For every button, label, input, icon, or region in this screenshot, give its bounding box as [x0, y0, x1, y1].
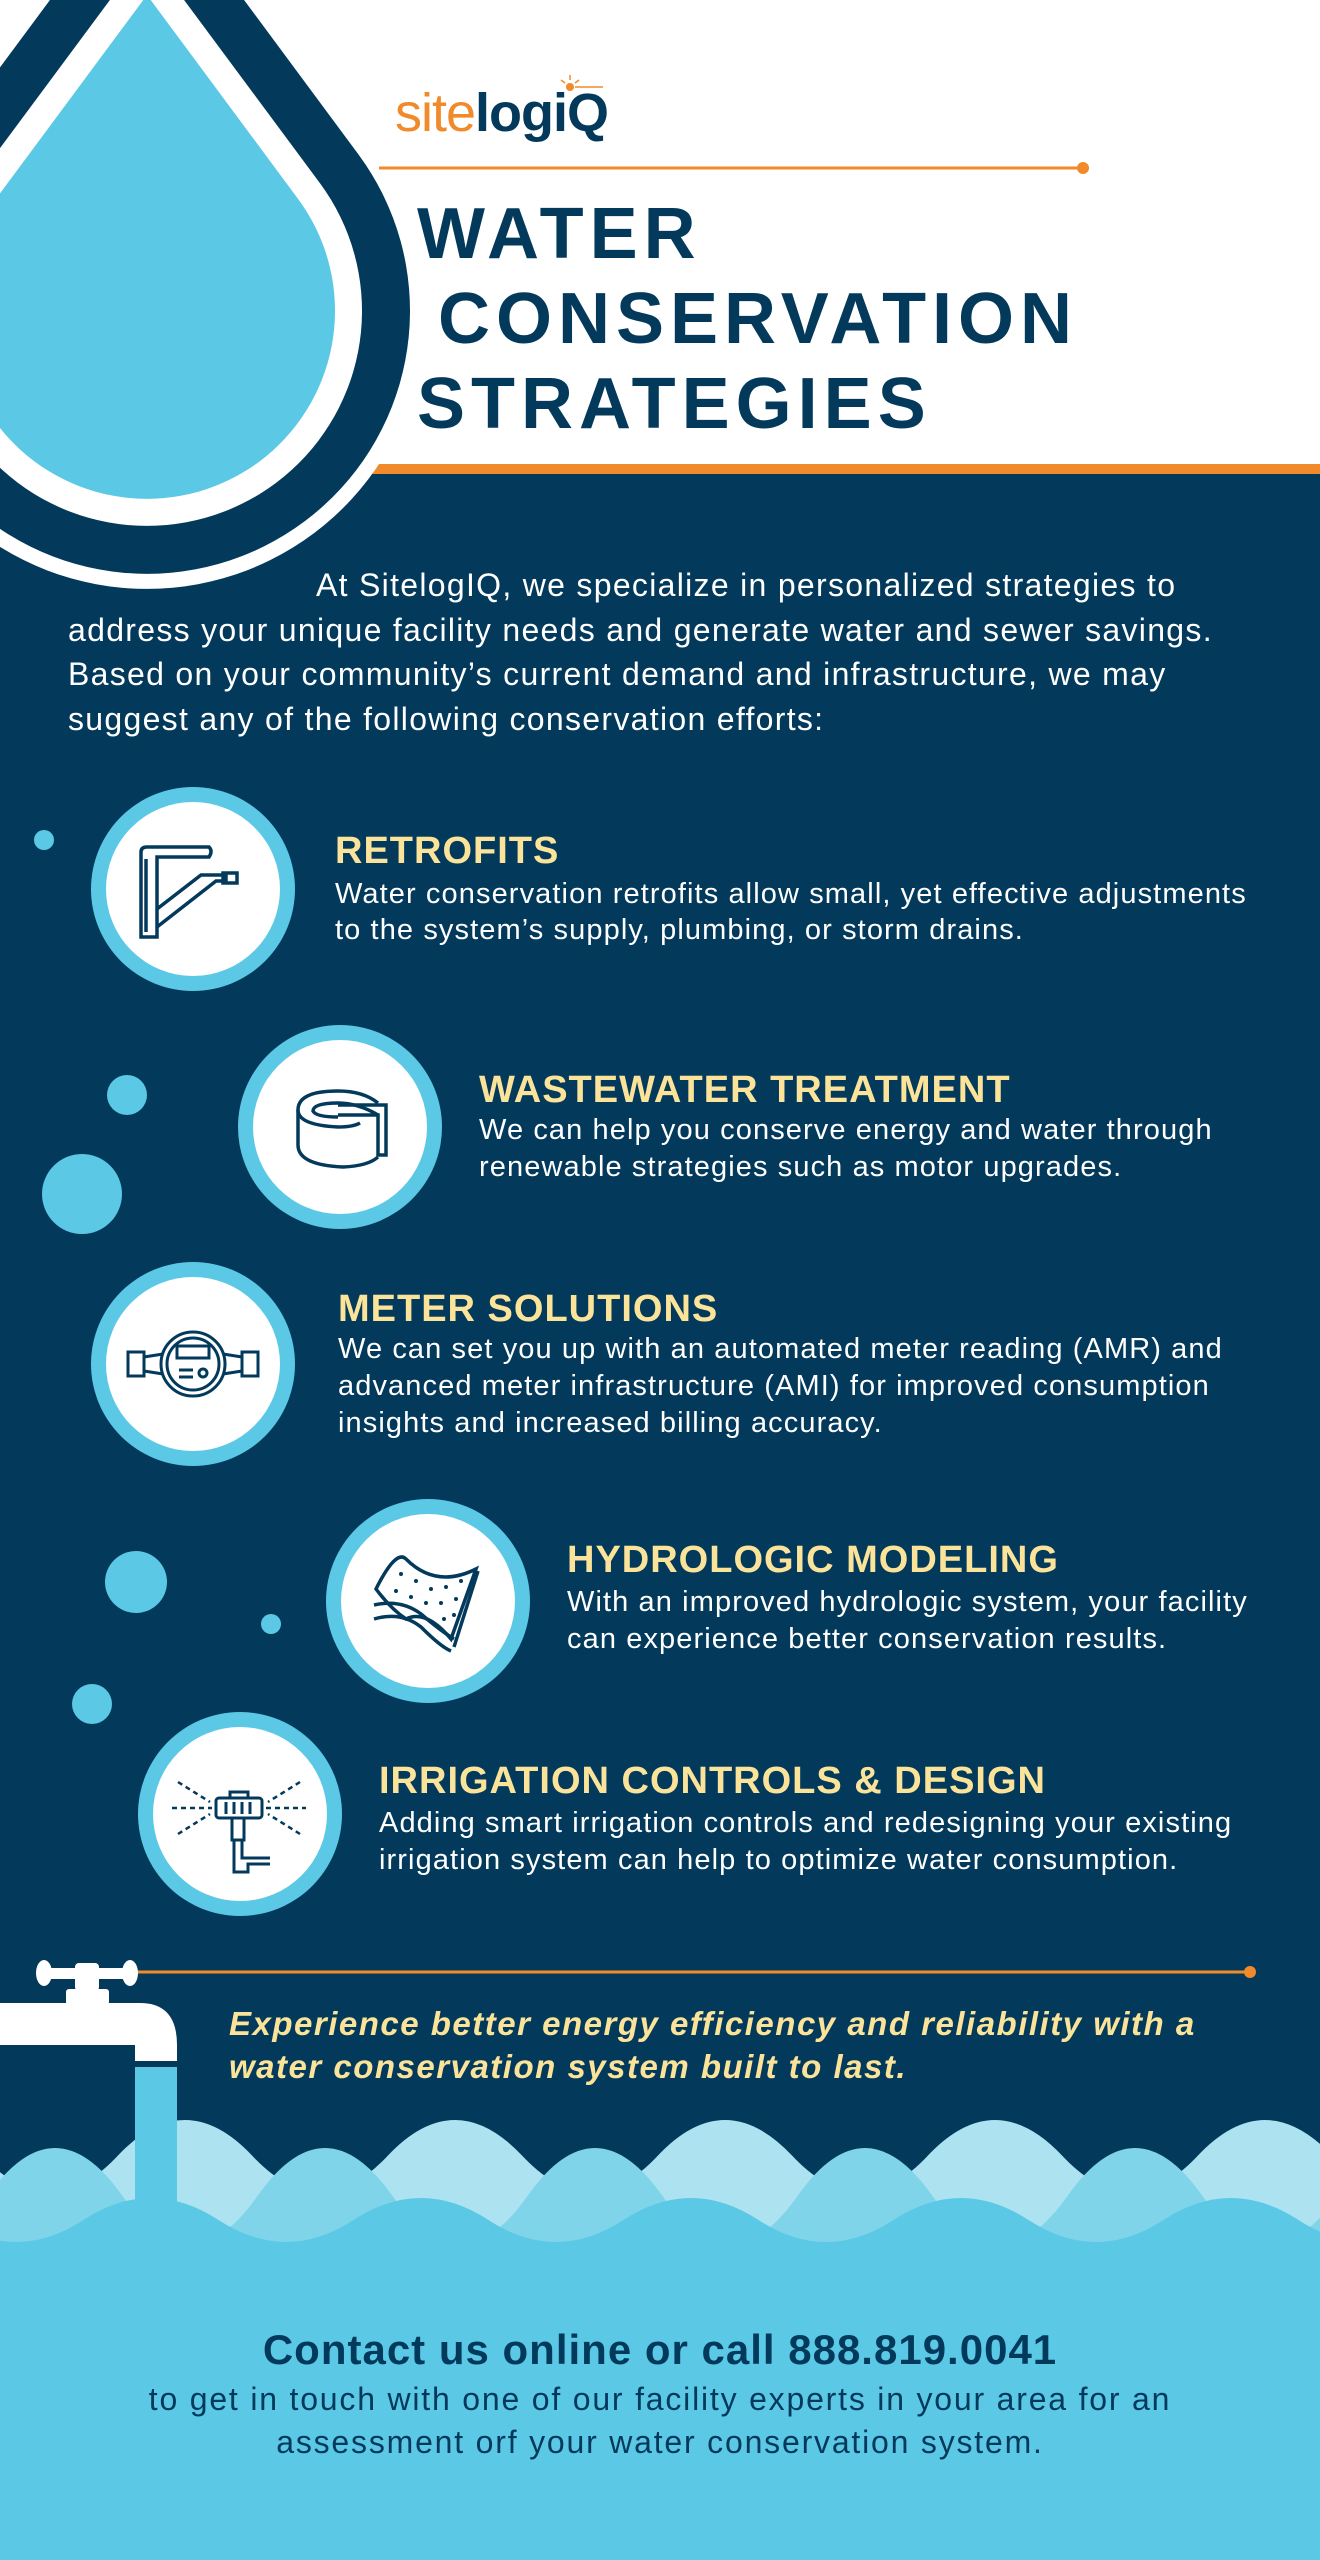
text: wastewater description [479, 1114, 1213, 1183]
contact text: assessment orf your water conservation system. [276, 2424, 1044, 2460]
panel: wastewater treatment [238, 1025, 1213, 1229]
intro paragraph: At SitelogIQ, we specialize in personalized strategies to [316, 567, 1176, 603]
closing statement: Experience better energy efficiency and reliability with a [229, 2005, 1196, 2042]
contact heading: Contact us online or call 888.819.0041 [263, 2326, 1057, 2373]
icon: wastewater tank [238, 1025, 442, 1229]
intro paragraph: Based on your community’s current demand and infrastructure, we may [68, 656, 1167, 692]
closing statement [229, 2005, 1196, 2085]
icon: header water drop [0, 0, 410, 589]
icon: water meter [91, 1262, 295, 1466]
intro paragraph: suggest any of the following conservation efforts: [68, 700, 824, 736]
heading: wastewater: WASTEWATER TREATMENT [479, 1069, 1011, 1111]
intro paragraph: address your unique facility needs and generate water and sewer savings. [68, 612, 1213, 648]
title: STRATEGIES [417, 364, 932, 444]
closing statement: water conservation system built to last. [229, 2048, 907, 2085]
decorative bubbles [34, 830, 281, 1724]
text: irrigation description [379, 1807, 1232, 1876]
contact text: to get in touch with one of our facility experts in your area for an [149, 2381, 1171, 2417]
title [417, 194, 1078, 444]
panel: hydrologic modeling [326, 1499, 1248, 1703]
heading: meter solutions: METER SOLUTIONS [338, 1288, 718, 1330]
panel: meter solutions [91, 1262, 1223, 1466]
panel: retrofits [91, 787, 1247, 991]
icon: faucet [91, 787, 295, 991]
text: hydrologic description: can experience better conservation results. [567, 1623, 1167, 1655]
heading: hydrologic: HYDROLOGIC MODELING [567, 1539, 1059, 1581]
text: wastewater description: renewable strategies such as motor upgrades. [479, 1151, 1122, 1183]
text: hydrologic description [567, 1586, 1248, 1655]
title: CONSERVATION [438, 279, 1078, 359]
text: irrigation description: irrigation system can help to optimize water consumption. [379, 1844, 1178, 1876]
orange divider bottom [138, 1966, 1256, 1978]
orange header band [0, 464, 1320, 474]
text: meter description [338, 1333, 1223, 1439]
heading: irrigation: IRRIGATION CONTROLS & DESIGN [379, 1760, 1046, 1802]
text: meter description: advanced meter infrastructure (AMI) for improved consumption [338, 1370, 1210, 1402]
heading: retrofits: RETROFITS [335, 830, 559, 872]
text: hydrologic description: With an improved hydrologic system, your facility [567, 1586, 1248, 1618]
icon: tap faucet [0, 1960, 177, 2061]
icon: hydrologic layers [326, 1499, 530, 1703]
panel: irrigation controls [138, 1712, 1232, 1916]
text: meter description: We can set you up with an automated meter reading (AMR) and [338, 1333, 1223, 1365]
orange divider with dot [379, 162, 1089, 174]
contact text [149, 2381, 1171, 2460]
text: wastewater description: We can help you conserve energy and water through [479, 1114, 1213, 1146]
title: WATER [417, 194, 702, 274]
text: retrofits description: Water conservation retrofits allow small, yet effective adjustments [335, 878, 1247, 910]
text: irrigation description: Adding smart irrigation controls and redesigning your existing [379, 1807, 1232, 1839]
text: retrofits description: to the system’s supply, plumbing, or storm drains. [335, 914, 1024, 946]
text: retrofits description [335, 878, 1247, 946]
icon: sprinkler [138, 1712, 342, 1916]
text: meter description: insights and increased billing accuracy. [338, 1407, 883, 1439]
logo: sitelogiQ: sitelogiQ [395, 83, 608, 143]
intro paragraph [68, 567, 1213, 736]
